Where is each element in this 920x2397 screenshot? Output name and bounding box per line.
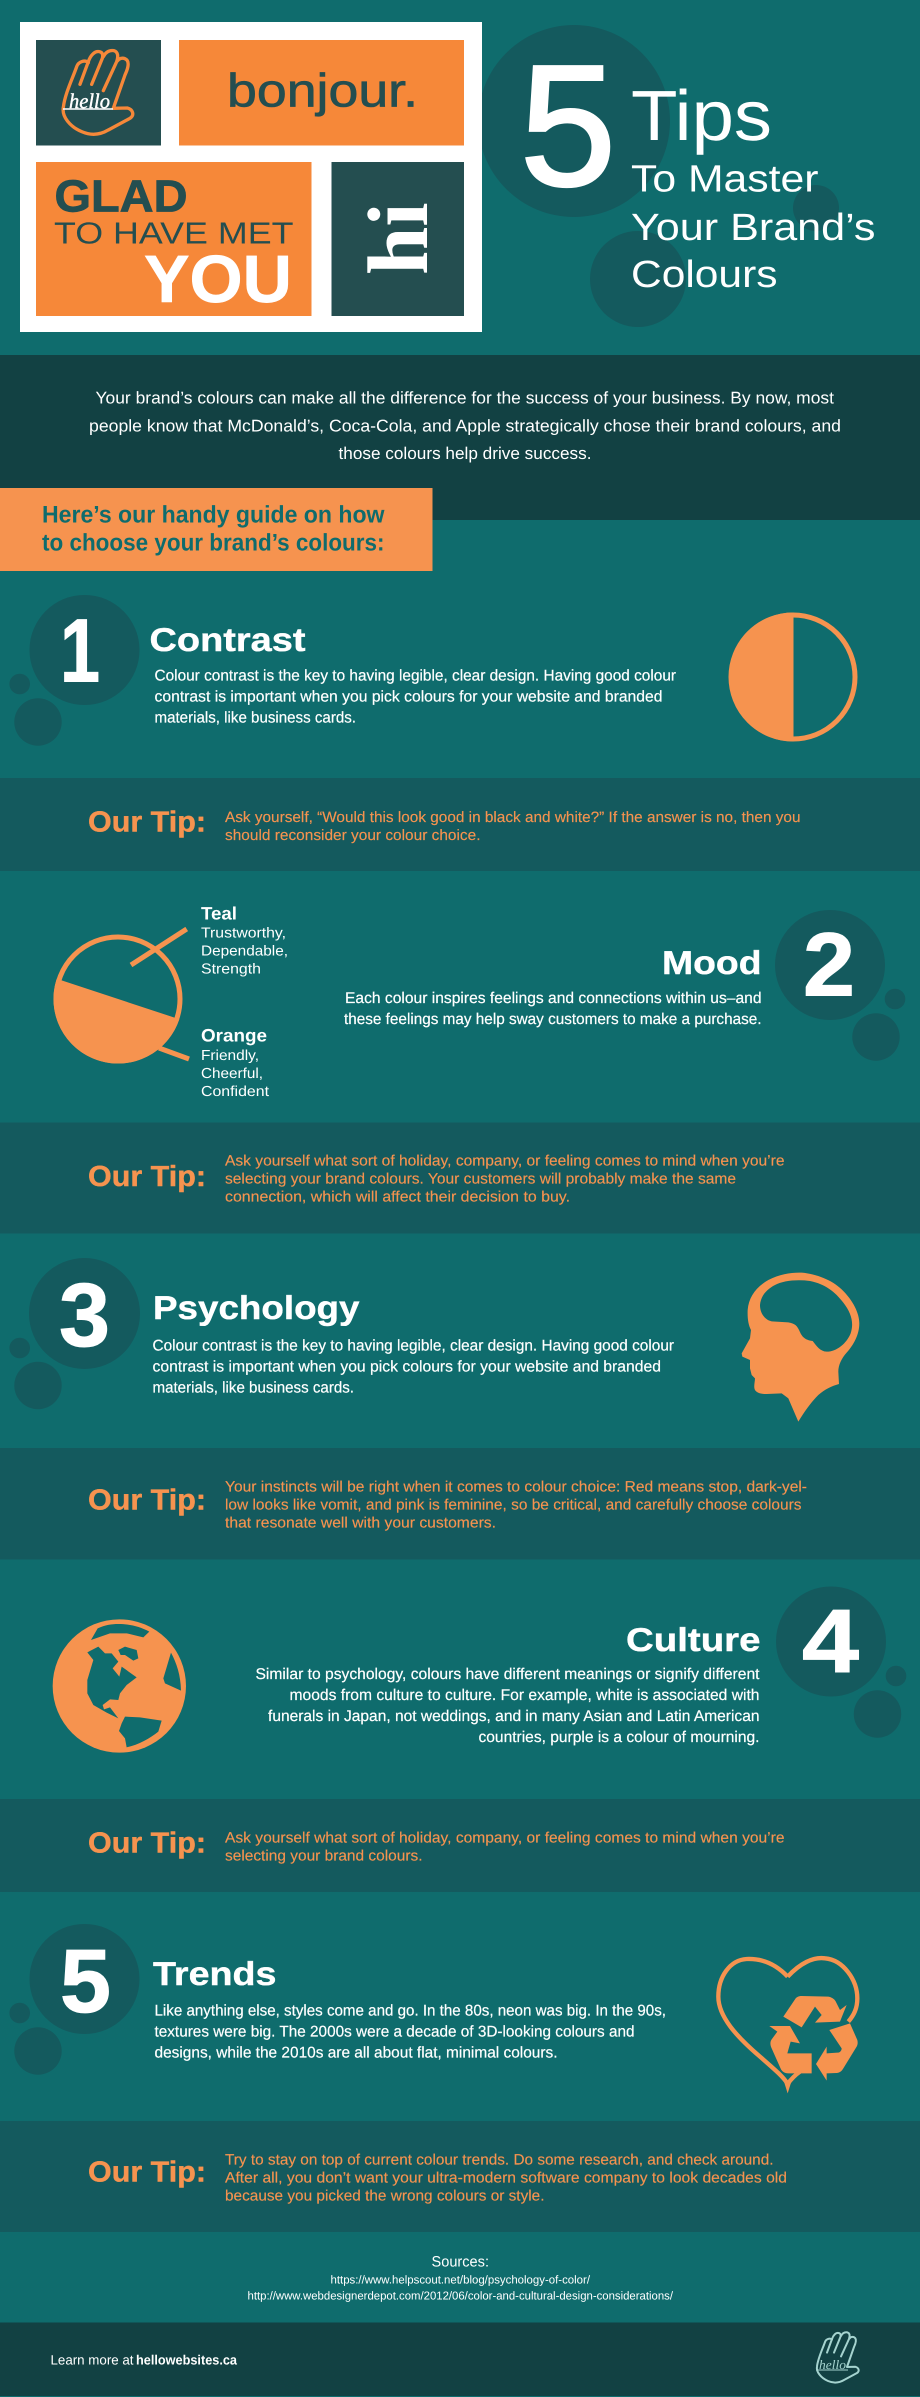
footer link text: hellowebsites.ca xyxy=(136,2352,237,2368)
number badge 5: 5 xyxy=(60,1932,111,2032)
number badge 1 xyxy=(9,595,140,746)
sources: Sources: xyxy=(432,2254,489,2270)
footer link text: Learn more at xyxy=(50,2352,134,2368)
panel: 1 contrast xyxy=(9,595,855,746)
tip text: Ask yourself what sort of holiday, company, or feeling comes to mind when you’re xyxy=(225,1830,784,1846)
tip band 1 xyxy=(0,778,920,871)
body text: contrast is important when you pick colours for your website and branded xyxy=(154,688,662,706)
header panel xyxy=(20,22,876,332)
orange guide banner: to choose your brand’s colours: xyxy=(42,530,384,556)
icon: half filled circle xyxy=(729,612,855,742)
icon: heart with recycle arrows xyxy=(718,1958,858,2093)
body text: contrast is important when you pick colours for your website and branded xyxy=(152,1358,661,1376)
tip text: Ask yourself, “Would this look good in black and white?” If the answer is no, then you xyxy=(225,809,800,826)
tip text xyxy=(225,1830,784,1864)
tip text: Your instincts will be right when it comes to colour choice: Red means stop, dark-yel- xyxy=(225,1478,807,1496)
title: To Master xyxy=(631,158,819,200)
number badge 4 xyxy=(776,1586,906,1738)
sources: http://www.webdesignerdepot.com/2012/06/color-and-cultural-design-considerations/ xyxy=(248,2290,674,2302)
label: teal: Strength xyxy=(201,962,261,978)
label: teal: Dependable, xyxy=(201,944,288,960)
label: teal xyxy=(201,904,288,978)
tile: glad to have met you: TO HAVE MET xyxy=(54,216,294,250)
white greeting frame xyxy=(20,22,482,332)
sources xyxy=(248,2254,674,2302)
tile: glad to have met you: YOU xyxy=(144,242,292,317)
title: Colours xyxy=(631,254,778,296)
body text: Colour contrast is the key to having legible, clear design. Having good colour xyxy=(152,1338,674,1354)
title: Tips xyxy=(631,77,772,156)
body text xyxy=(152,1338,674,1396)
tile: hello hand xyxy=(36,40,161,146)
number badge 4: 4 xyxy=(802,1592,859,1692)
body text: materials, like business cards. xyxy=(152,1380,354,1396)
tip text: should reconsider your colour choice. xyxy=(225,827,480,844)
tip text xyxy=(225,1152,784,1206)
tip band 3: Our Tip: xyxy=(88,1484,206,1516)
number badge 2 xyxy=(775,910,905,1061)
body text: Like anything else, styles come and go. In the 80s, neon was big. In the 90s, xyxy=(154,2002,666,2020)
intro text: Your brand’s colours can make all the difference for the success of your business. By now, most xyxy=(96,388,834,408)
body text xyxy=(154,2002,666,2062)
tile: bonjour xyxy=(179,40,464,146)
tip text: Try to stay on top of current colour trends. Do some research, and check around. xyxy=(225,2152,774,2168)
tip text: because you picked the wrong colours or style. xyxy=(225,2188,544,2204)
number badge 1: 1 xyxy=(60,602,100,702)
tip band 2: Our Tip: xyxy=(88,1161,206,1193)
tip text xyxy=(225,2152,787,2204)
body text xyxy=(154,668,676,726)
heading: Culture xyxy=(626,1621,760,1658)
title xyxy=(631,77,876,296)
body text: countries, purple is a colour of mourning. xyxy=(478,1729,760,1746)
intro text: those colours help drive success. xyxy=(338,444,592,463)
tile: glad to have met you xyxy=(36,162,312,317)
tip band 3 xyxy=(0,1448,920,1560)
tip band 5 xyxy=(0,2121,920,2232)
label: teal: Trustworthy, xyxy=(201,926,286,942)
icon: pie with leader lines xyxy=(53,929,189,1064)
orange guide banner: Here’s our handy guide on how xyxy=(42,502,385,528)
tip text xyxy=(225,1478,807,1532)
sources: https://www.helpscout.net/blog/psychology-of-color/ xyxy=(330,2274,591,2286)
label: orange: Orange xyxy=(201,1026,267,1046)
number badge 3: 3 xyxy=(59,1266,110,1366)
body text: moods from culture to culture. For example, white is associated with xyxy=(290,1687,760,1704)
body text xyxy=(344,990,762,1028)
intro text: people know that McDonald’s, Coca-Cola, and Apple strategically chose their brand colours, and xyxy=(89,416,841,436)
body text: designs, while the 2010s are all about flat, minimal colours. xyxy=(154,2044,558,2062)
tip band 4: Our Tip: xyxy=(88,1828,206,1860)
orange guide banner xyxy=(0,488,432,571)
intro band xyxy=(0,355,920,520)
big number 5: 5 xyxy=(520,30,616,222)
body text: materials, like business cards. xyxy=(154,710,356,726)
label: orange: Cheerful, xyxy=(201,1066,263,1082)
tip text: Ask yourself what sort of holiday, company, or feeling comes to mind when you’re xyxy=(225,1152,784,1170)
heading: Psychology xyxy=(153,1289,360,1326)
title: Your Brand’s xyxy=(631,207,876,249)
body text: textures were big. The 2000s were a decade of 3D-looking colours and xyxy=(154,2024,634,2040)
tip text: selecting your brand colours. xyxy=(225,1848,422,1864)
header decorative circles xyxy=(478,25,839,327)
tile: glad to have met you: GLAD xyxy=(54,170,188,222)
heading: Mood xyxy=(662,944,762,981)
panel: 4 culture xyxy=(53,1586,906,1753)
intro text xyxy=(89,388,841,463)
number badge 5 xyxy=(9,1924,140,2075)
tip band 5: Our Tip: xyxy=(88,2156,206,2188)
label: orange xyxy=(201,1026,269,1100)
icon: globe xyxy=(53,1619,186,1753)
body text: funerals in Japan, not weddings, and in many Asian and Latin American xyxy=(268,1708,760,1725)
heading: Trends xyxy=(153,1955,276,1992)
number badge 2: 2 xyxy=(803,916,855,1016)
tip text: selecting your brand colours. Your customers will probably make the same xyxy=(225,1170,736,1188)
panel: 2 mood xyxy=(53,904,905,1100)
footer band xyxy=(0,2322,920,2396)
tip text: After all, you don’t want your ultra-modern software company to look decades old xyxy=(225,2170,787,2186)
tip text: low looks like vomit, and pink is feminine, so be critical, and carefully choose colours xyxy=(225,1496,802,1514)
tile: hi: hi xyxy=(350,202,446,275)
panel: 3 psychology xyxy=(9,1258,859,1422)
tip text xyxy=(225,809,800,844)
body text: Each colour inspires feelings and connections within us–and xyxy=(345,990,762,1007)
icon: footer hello hand xyxy=(816,2332,859,2383)
body text: Similar to psychology, colours have different meanings or signify different xyxy=(256,1666,760,1683)
heading: Contrast xyxy=(150,621,306,658)
label: teal: Teal xyxy=(201,904,237,924)
panel: 5 trends xyxy=(9,1924,858,2093)
tip band 2 xyxy=(0,1122,920,1234)
tip text: connection, which will affect their decision to buy. xyxy=(225,1188,570,1206)
icon: footer hello hand: hello xyxy=(819,2357,847,2372)
hello script: hello xyxy=(69,89,110,113)
tile: hi xyxy=(332,162,464,316)
tile: bonjour: bonjour. xyxy=(227,64,418,116)
tip band 4 xyxy=(0,1799,920,1892)
body text: Colour contrast is the key to having legible, clear design. Having good colour xyxy=(154,668,676,684)
icon: head with brain xyxy=(742,1273,859,1422)
label: orange: Friendly, xyxy=(201,1048,259,1064)
icon: waving hand xyxy=(63,51,133,134)
body text: these feelings may help sway customers to make a purchase. xyxy=(344,1011,762,1028)
body text xyxy=(256,1666,760,1746)
footer link text xyxy=(50,2352,237,2368)
tip text: that resonate well with your customers. xyxy=(225,1514,496,1532)
number badge 3 xyxy=(9,1258,140,1409)
tip band 1: Our Tip: xyxy=(88,806,206,838)
label: orange: Confident xyxy=(201,1084,269,1100)
